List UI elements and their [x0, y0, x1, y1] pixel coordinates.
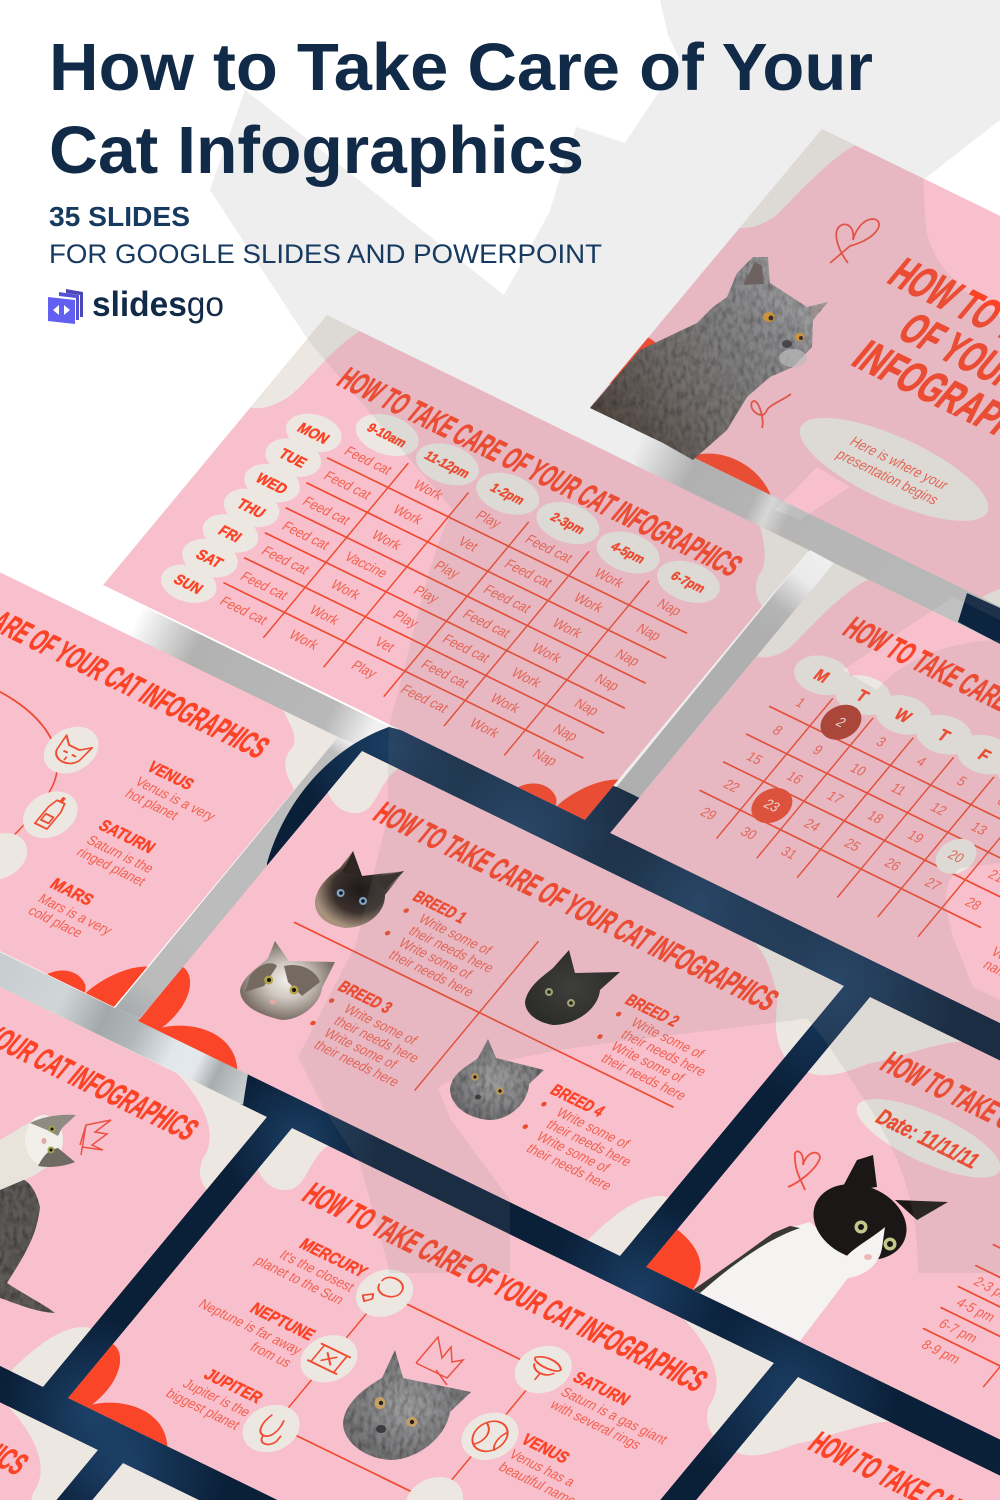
slide: calendar [610, 563, 1000, 1068]
calendar numbers: 18 [864, 808, 887, 826]
schedule cells: Play [390, 607, 422, 631]
breed 2: their needs here [598, 1051, 690, 1103]
breed 2: their needs here [618, 1027, 710, 1079]
schedule cells: Work [591, 565, 628, 591]
planet text: Mercury: planet to the Sun [252, 1253, 347, 1307]
breed 1: their needs here [386, 947, 477, 1000]
planet list: Mars: cold place [25, 903, 86, 940]
photo: tilted cat [0, 1115, 76, 1313]
breed 3 [310, 980, 419, 1086]
icon: crown scribble [416, 1337, 463, 1385]
node: stethoscope [231, 1397, 311, 1461]
icon: cat face [44, 726, 98, 774]
schedule cells: Play [410, 583, 443, 606]
photo: tuxedo cat [693, 1155, 948, 1341]
day header pills: SUN [170, 572, 206, 598]
schedule cells: Work [508, 665, 545, 690]
photo: tabby cat head [240, 941, 335, 1020]
calendar numbers: 28 [962, 895, 985, 913]
time labels [918, 1274, 1000, 1367]
calendar numbers: 27 [922, 875, 944, 893]
breed 1 [384, 890, 494, 996]
breed 4: their needs here [543, 1117, 635, 1169]
schedule cells: Work [549, 616, 586, 641]
breed 3: their needs here [311, 1037, 403, 1090]
time header pills [356, 414, 720, 603]
subtitle bubble [800, 418, 988, 521]
planet text: Jupiter: JUPITER [200, 1366, 267, 1407]
schedule cells: Feed cat [321, 468, 375, 502]
time header pills: 4-5pm [608, 539, 649, 566]
node: collar charm [356, 1270, 413, 1317]
slide: weekly schedule [102, 315, 809, 822]
breed 2: Write some of [608, 1039, 688, 1085]
time labels: 6-7 pm [936, 1316, 981, 1346]
calendar numbers: 29 [697, 804, 720, 823]
schedule cells: Work [529, 640, 565, 666]
breed 3: BREED 3 [334, 978, 396, 1017]
breed 1: BREED 1 [409, 888, 471, 927]
breed 1: Write some of [415, 911, 495, 958]
day header pills: MON [293, 421, 332, 448]
icon: heart scribble [830, 219, 879, 263]
schedule cells: Work [286, 627, 322, 652]
time header pills: 1-2pm [487, 480, 528, 507]
schedule cells: Nap [571, 696, 602, 718]
time header pills: 2-3pm [547, 509, 589, 537]
schedule cells: Work [410, 477, 447, 502]
logo wordmark: slidesgo [92, 285, 224, 324]
schedule cells: Work [390, 502, 426, 527]
breed 4: Write some of [533, 1129, 613, 1175]
subtitle: FOR GOOGLE SLIDES AND POWERPOINT [49, 239, 602, 269]
schedule cells: Feed cat [258, 543, 313, 577]
calendar numbers: 5 [954, 774, 970, 789]
planet text: Mercury: It's the closest [276, 1247, 358, 1295]
time header pills: 9-10am [364, 420, 410, 450]
schedule cells: Nap [550, 721, 581, 744]
breed 4: Write some of [553, 1105, 633, 1151]
shadow strip beside left planets slide [115, 737, 372, 1018]
breed 4: their needs here [523, 1141, 615, 1193]
navy backdrop panels [0, 727, 1000, 1500]
photo: central grey cat head [343, 1350, 471, 1460]
planet text: Venus: VENUS [517, 1431, 573, 1467]
weekday pills: M [810, 666, 833, 687]
schedule cells: Vet [455, 534, 482, 554]
schedule cells [217, 444, 685, 769]
icon: third node [0, 833, 28, 880]
schedule cells: Work [570, 590, 607, 615]
calendar numbers: 13 [968, 819, 990, 838]
planet list: Saturn [76, 820, 156, 886]
schedule grid lines [223, 457, 688, 759]
calendar numbers: 9 [810, 742, 826, 758]
shadow band under title slide [600, 404, 1000, 644]
schedule cells: Feed cat [341, 444, 395, 477]
slide count: 35 SLIDES [49, 201, 190, 232]
planet list: Mars [28, 878, 112, 937]
planet list: Venus [125, 760, 216, 822]
schedule cells: Vaccine [341, 549, 391, 581]
icon: loop scribble [751, 394, 791, 428]
connector frame [288, 1304, 526, 1492]
day header pills: FRI [214, 523, 245, 546]
slide: cat breeds [138, 751, 844, 1256]
schedule cells: Work [327, 577, 364, 602]
day header pills [161, 414, 342, 603]
planet text: Saturn [546, 1368, 684, 1460]
planet text: Jupiter: Jupiter is the [180, 1376, 254, 1420]
breed 2: BREED 2 [621, 991, 683, 1030]
time table lines [906, 1223, 1000, 1471]
breed 4: BREED 4 [546, 1081, 608, 1120]
calendar numbers: 26 [881, 855, 904, 874]
planet list: Saturn: ringed planet [73, 845, 149, 889]
calendar numbers: 16 [783, 769, 806, 787]
planet text: Saturn: with several rings [546, 1397, 645, 1452]
calendar numbers: 24 [801, 816, 824, 835]
schedule cells: Vet [371, 634, 398, 655]
calendar numbers: 20 [945, 847, 968, 866]
breed 2: Write some of [628, 1015, 708, 1061]
breed 2 [597, 994, 706, 1100]
slide: bottom centre [0, 1463, 605, 1500]
planet text: Neptune: Neptune is far away [195, 1296, 306, 1357]
time labels: 4-5 pm [953, 1295, 998, 1325]
planet list: Saturn: Saturn is the [83, 833, 157, 876]
schedule cells: Feed cat [501, 556, 556, 590]
cat silhouette overlay [210, 0, 1000, 1273]
time header pills: 6-7pm [668, 568, 709, 596]
calendar numbers: 11 [887, 780, 909, 798]
day header pills: SAT [192, 547, 226, 572]
planet text: Neptune: NEPTUNE [246, 1300, 319, 1344]
slide: date and tuxedo cat [646, 997, 1000, 1500]
weekday pills: W [890, 706, 916, 727]
schedule cells: Feed cat [237, 569, 292, 603]
calendar numbers: 22 [720, 777, 743, 795]
icon: crown scribble left [80, 1120, 111, 1155]
timeline arc [0, 690, 58, 835]
quadrant dividers [294, 922, 674, 1108]
calendar numbers: 25 [841, 836, 864, 854]
date bubble [842, 1085, 1000, 1192]
slide: left planets [0, 572, 338, 1007]
schedule cells: Work [306, 603, 343, 628]
slide: cat title [590, 129, 1000, 642]
calendar numbers: 10 [847, 760, 870, 779]
icon: slidesgo logo [48, 289, 83, 324]
schedule cells: Nap [633, 621, 664, 643]
calendar numbers: 23 [760, 796, 783, 815]
icon: heart scribble date [788, 1151, 820, 1190]
calendar numbers: 2 [833, 715, 849, 730]
calendar numbers: 31 [778, 844, 801, 862]
calendar numbers: 17 [824, 788, 847, 807]
time labels: 8-9 pm [918, 1337, 964, 1367]
calendar numbers [700, 698, 1000, 910]
schedule cells: Work [369, 528, 405, 553]
calendar numbers: 15 [743, 749, 766, 767]
photo: black cat head [525, 950, 620, 1025]
photo: grey cat [590, 257, 828, 460]
breed 4 [522, 1084, 632, 1190]
schedule cells: Work [487, 691, 524, 716]
slide: bottom left [0, 1215, 98, 1500]
breed 3: their needs here [331, 1013, 423, 1066]
note text [983, 946, 1000, 976]
highlighted dates [751, 704, 976, 874]
breed 3: Write some of [341, 1001, 421, 1048]
planet list: Venus: VENUS [143, 758, 198, 794]
weekday pills: T [852, 687, 872, 706]
schedule cells: Work [466, 715, 503, 741]
schedule cells: Feed cat [397, 682, 452, 716]
calendar numbers: 19 [904, 828, 927, 846]
slide title: HOW TO TAKE CARE OF YOUR CAT INFOGRAPHICS [330, 361, 750, 583]
schedule cells: Play [431, 558, 463, 581]
calendar numbers: 8 [769, 723, 786, 738]
planet text: Venus [495, 1431, 604, 1500]
planet text: Saturn: SATURN [569, 1369, 634, 1409]
planet text: Venus: Venus has a [506, 1447, 579, 1490]
planet text: Saturn: Saturn is a gas giant [558, 1384, 671, 1447]
weekday pills: T [933, 726, 954, 745]
schedule cells: Play [348, 658, 380, 681]
navy corner behind title slide [958, 593, 1000, 644]
schedule cells: Nap [529, 746, 560, 769]
schedule cells: Feed cat [439, 631, 493, 665]
schedule cells: Feed cat [480, 582, 534, 616]
day header pills: THU [233, 496, 268, 522]
node: ball [450, 1404, 530, 1468]
calendar numbers: 4 [913, 754, 930, 770]
shadow band under schedule slide [130, 600, 400, 748]
node: collar [503, 1338, 583, 1402]
node: food can [300, 1335, 358, 1382]
planet list: Saturn: SATURN [95, 817, 159, 857]
schedule cells: Feed cat [217, 594, 271, 627]
subtitle bubble: Here is where your [846, 433, 953, 493]
planet text: Neptune: from us [247, 1339, 295, 1370]
title: Cat Infographics [49, 113, 584, 188]
planet list: Mars: MARS [46, 875, 98, 909]
slide: planets and central cat [68, 1128, 774, 1500]
calendar grid lines [699, 698, 1000, 938]
day header pills: TUE [275, 446, 310, 471]
schedule cells: Feed cat [460, 607, 514, 641]
planet list: Venus: hot planet [122, 786, 182, 823]
title [49, 30, 873, 188]
schedule cells: Nap [612, 646, 643, 669]
time header pills: 11-12pm [421, 448, 474, 481]
node: bottom [394, 1469, 474, 1500]
day header pills: WED [252, 471, 291, 498]
schedule cells: Feed cat [299, 494, 354, 528]
calendar numbers: 12 [927, 800, 950, 818]
weekday pills [794, 656, 1000, 779]
planet text: Jupiter [163, 1358, 267, 1433]
planet text: Jupiter: biggest planet [163, 1386, 243, 1433]
calendar numbers: 30 [737, 824, 761, 843]
schedule cells: Feed cat [418, 657, 472, 691]
calendar numbers: 1 [792, 695, 809, 710]
planet list: Venus: Venus is a very [132, 774, 219, 824]
photo: siamese cat head [315, 851, 404, 928]
blue-gray band under left planets slide [0, 952, 248, 1105]
breed 1: Write some of [395, 935, 475, 982]
schedule cells: Nap [592, 671, 623, 694]
icon: bottle [23, 791, 78, 838]
breed 1: their needs here [405, 923, 497, 976]
slide: bottom right [574, 1377, 1000, 1500]
calendar numbers: 3 [873, 734, 889, 750]
title: How to Take Care of Your [49, 30, 873, 105]
schedule cells: Nap [654, 596, 685, 619]
schedule cells: Feed cat [522, 532, 576, 566]
schedule cells: Play [473, 508, 505, 531]
slide: left cat portrait [0, 987, 267, 1387]
weekday pills: F [974, 746, 994, 765]
planet list: Mars: Mars is a very [35, 891, 116, 938]
photo: grey cat head [450, 1039, 544, 1120]
breed 3: Write some of [321, 1025, 401, 1072]
planet text: Mercury: MERCURY [295, 1235, 371, 1281]
planet text: Neptune [185, 1280, 319, 1370]
shadow strip between schedule and calendar slides [587, 550, 834, 833]
subtitle bubble: presentation begins [833, 446, 943, 507]
schedule cells: Feed cat [279, 519, 333, 552]
planet text: Mercury [252, 1225, 371, 1307]
